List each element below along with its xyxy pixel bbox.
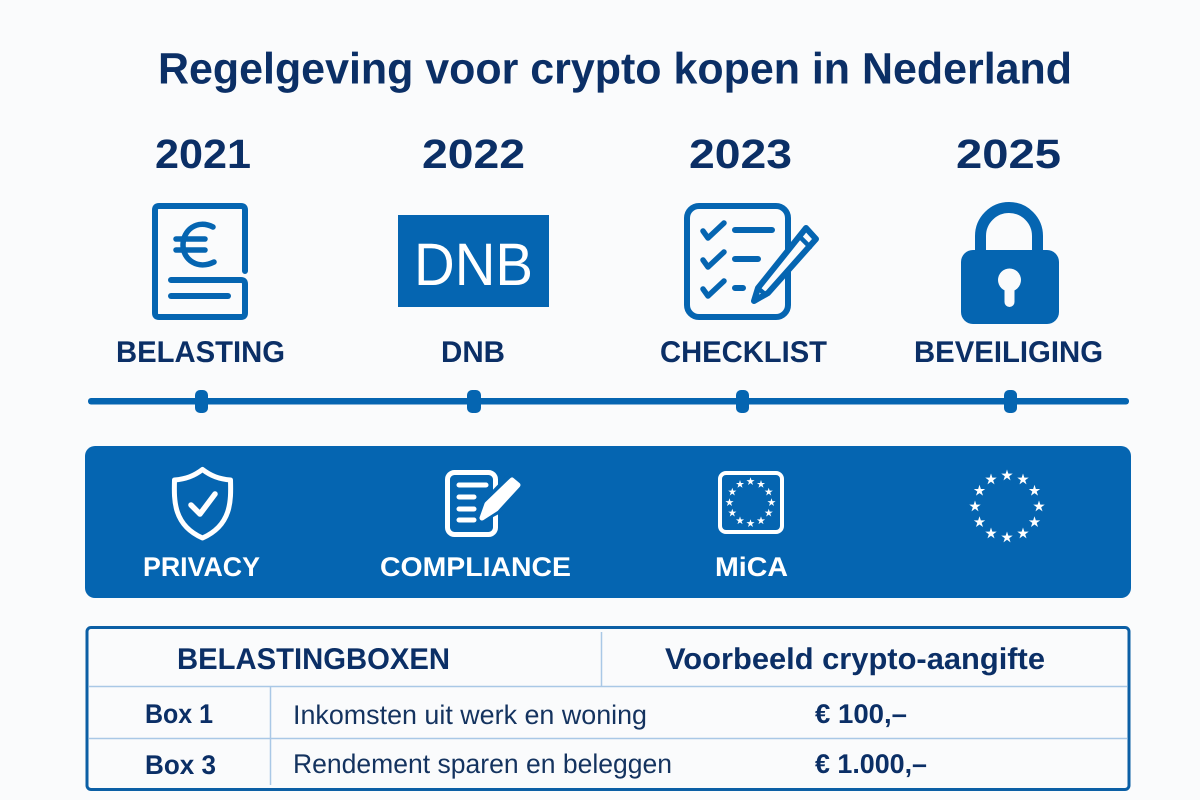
label: PRIVACY: PRIVACY <box>143 552 260 582</box>
panel: blue themes band <box>85 446 1131 598</box>
row description: Box 1: Inkomsten uit werk en woning <box>293 700 647 730</box>
table header: Voorbeeld crypto-aangifte: Voorbeeld crypto-aangifte <box>665 643 1045 676</box>
year: 2025: 2025 <box>956 131 1061 177</box>
label: DNB: DNB <box>441 336 505 369</box>
label: BEVEILIGING: BEVEILIGING <box>914 336 1103 369</box>
icon: MiCA EU flag square <box>720 473 782 532</box>
table header: BELASTINGBOXEN: BELASTINGBOXEN <box>177 643 450 676</box>
row: Box 1: Box 1 <box>145 699 213 729</box>
label: MiCA: MiCA <box>715 552 788 582</box>
row description: Box 3: Rendement sparen en beleggen <box>293 749 672 779</box>
icon: padlock <box>961 208 1059 324</box>
panel: tax table <box>87 628 1129 790</box>
year: 2021: 2021 <box>155 131 251 177</box>
row: Box 3: Box 3 <box>145 750 216 780</box>
icon: DNB logo <box>398 215 549 307</box>
timeline <box>88 390 1129 413</box>
year: 2022: 2022 <box>422 131 525 177</box>
icon: compliance document with pencil <box>448 472 520 534</box>
icon: DNB logo: DNB <box>414 231 533 298</box>
icon: checklist with pencil <box>687 206 816 317</box>
label: CHECKLIST: CHECKLIST <box>660 336 827 369</box>
title: Regelgeving voor crypto kopen in Nederland <box>158 44 1072 94</box>
icon: privacy shield <box>174 470 231 538</box>
label: BELASTING: BELASTING <box>116 336 285 369</box>
icon: EU star circle <box>969 470 1045 542</box>
row amount: Box 3: € 1.000,– <box>815 749 927 779</box>
label: COMPLIANCE: COMPLIANCE <box>380 552 571 582</box>
year: 2023: 2023 <box>689 131 792 177</box>
icon: euro document <box>155 206 245 317</box>
row amount: Box 1: € 100,– <box>815 699 907 729</box>
